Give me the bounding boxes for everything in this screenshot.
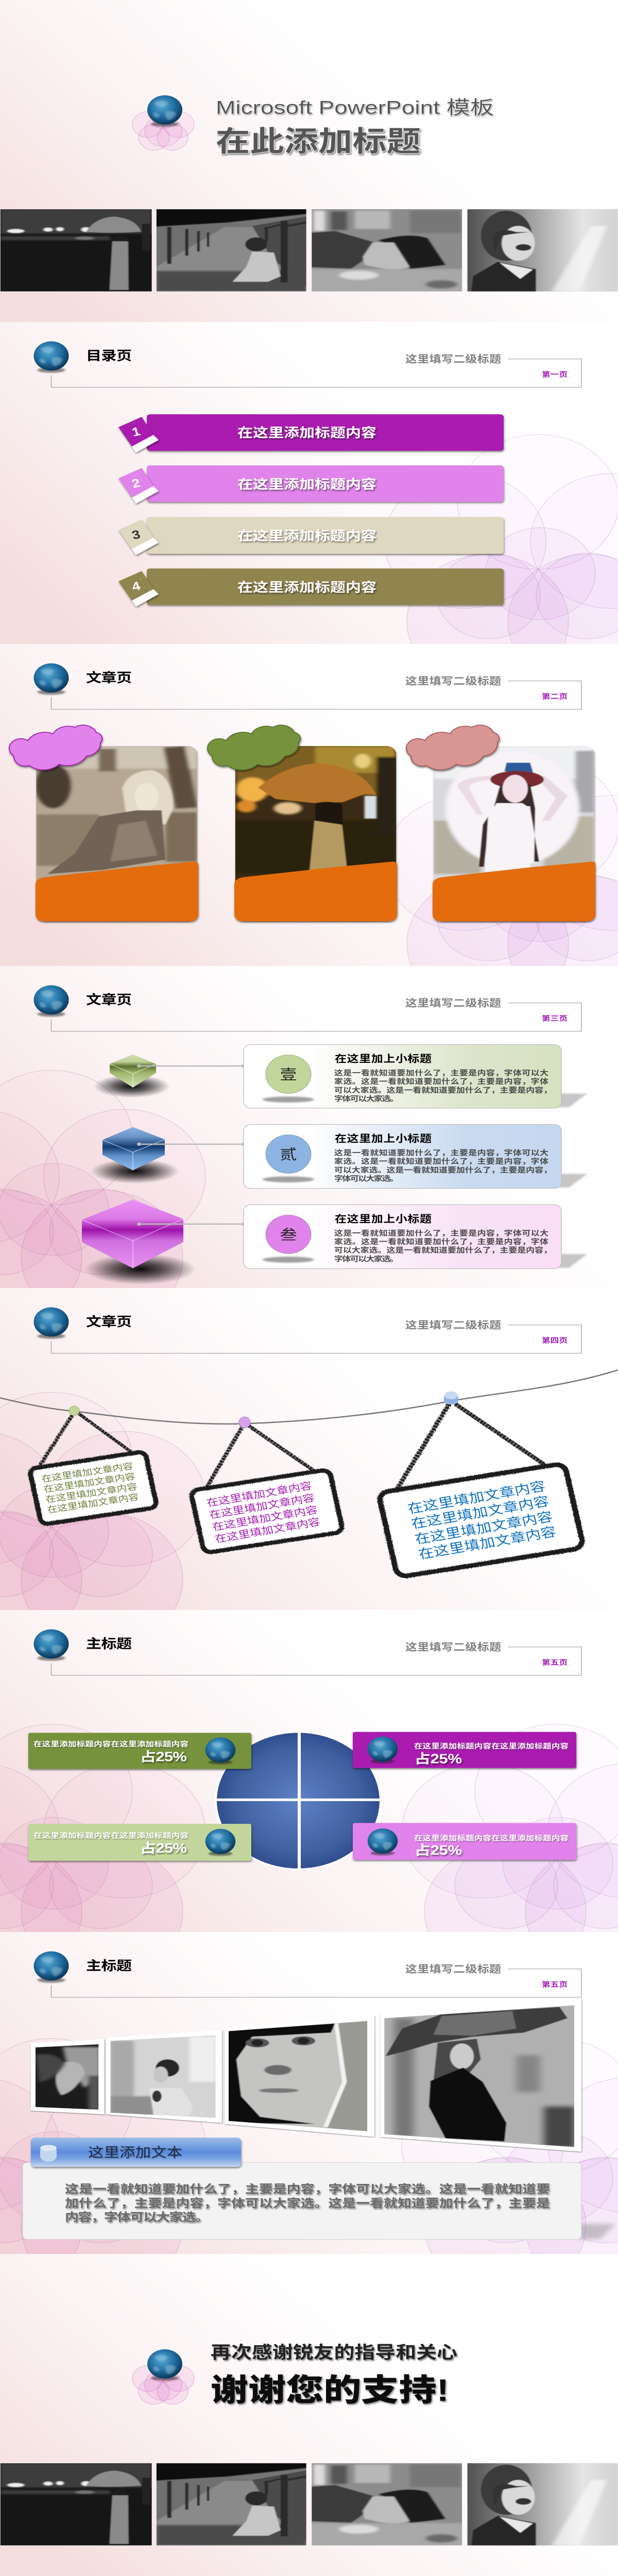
text card 1 — [244, 1045, 587, 1108]
bar — [147, 414, 504, 451]
decorative flower — [384, 756, 618, 1011]
panel body text: 加什么了，主要是内容，字体可以大家选。这是一看就知道要加什么了，主要是 — [65, 2196, 550, 2210]
decorative flower — [0, 1392, 205, 1647]
label: 在这里添加标题内容 — [237, 529, 376, 543]
sign text: 在这里填加文章内容 — [45, 1481, 138, 1504]
bar top right — [353, 1732, 576, 1768]
header frame — [52, 1003, 581, 1031]
icon: globe — [205, 1829, 235, 1856]
cube: green — [94, 1055, 170, 1098]
percentage: 占25% — [140, 1841, 187, 1856]
icon: globe — [34, 985, 69, 1016]
sign text: 在这里填加文章内容 — [410, 1494, 551, 1531]
header frame — [52, 1647, 581, 1675]
page title: 文章页 — [86, 1315, 132, 1329]
page title: 文章页 — [86, 993, 132, 1007]
badge numeral: 壹 — [280, 1067, 297, 1082]
background — [0, 1610, 618, 1932]
menu item 1 — [118, 414, 504, 452]
card body: 字体可以大家选。 — [334, 1255, 399, 1263]
quadrant disc — [215, 1731, 382, 1870]
sign text: 在这里填加文章内容 — [214, 1516, 321, 1545]
header — [34, 985, 581, 1031]
card body — [334, 1229, 552, 1263]
decorative flower right — [402, 2039, 618, 2293]
tag — [118, 571, 159, 607]
background — [0, 644, 618, 966]
panel body text: 这是一看就知道要加什么了，主要是内容，字体可以大家选。这是一看就知道要 — [65, 2182, 550, 2196]
badge numeral: 叁 — [280, 1227, 297, 1243]
sign text: 在这里填加文章内容 — [205, 1480, 313, 1509]
card body: 这是一看就知道要加什么了，主要是内容，字体可以大 — [334, 1148, 548, 1157]
menu item 3 — [118, 517, 504, 555]
icon: globe — [368, 1828, 398, 1855]
subtitle: 这里填写二级标题 — [405, 353, 501, 365]
background — [0, 0, 618, 322]
thanks line one: 再次感谢锐友的指导和关心 — [211, 2343, 457, 2362]
sign text: 在这里填加文章内容 — [43, 1471, 136, 1494]
page title: 文章页 — [86, 671, 132, 685]
photo: woman with umbrella at night — [231, 744, 400, 923]
bar text: 在这里添加标题内容在这里添加标题内容 — [33, 1740, 188, 1749]
cloud tag — [208, 725, 300, 770]
orange panel — [234, 861, 397, 921]
percentage: 占25% — [415, 1752, 462, 1767]
card body: 可以大家选。这是一看就知道要加什么了，主要是内容， — [334, 1086, 552, 1094]
panel body text: 内容，字体可以大家选。 — [65, 2210, 209, 2224]
card body: 可以大家选。这是一看就知道要加什么了，主要是内容， — [334, 1165, 552, 1174]
subtitle: 这里填写二级标题 — [405, 1319, 501, 1331]
photo 3 frame — [225, 2015, 374, 2137]
menu item 2 — [118, 465, 504, 504]
icon: globe — [34, 1952, 69, 1982]
bar text: 在这里添加标题内容在这里添加标题内容 — [414, 1834, 569, 1842]
sign text: 在这里填加文章内容 — [41, 1461, 134, 1484]
card body — [334, 1148, 552, 1183]
sign text — [205, 1480, 321, 1545]
slide 1: cover — [0, 0, 618, 322]
card body: 家选。这是一看就知道要加什么了，主要是内容，字体 — [334, 1077, 548, 1086]
sign 1 — [29, 1406, 157, 1524]
decorative flower left — [0, 2039, 205, 2293]
slide 3: three photo cards — [0, 644, 618, 966]
label: 在这里添加标题内容 — [237, 580, 376, 595]
pin — [239, 1417, 250, 1428]
board — [379, 1463, 583, 1577]
decorative flower under globe — [132, 2365, 194, 2404]
icon: globe — [147, 95, 182, 127]
badge — [266, 1215, 311, 1253]
slide 2: contents — [0, 322, 618, 644]
background — [0, 322, 618, 644]
card body: 可以大家选。这是一看就知道要加什么了，主要是内容， — [334, 1246, 552, 1255]
slide 5: hanging signs — [0, 1288, 618, 1610]
card body: 字体可以大家选。 — [334, 1174, 399, 1183]
card 3 — [406, 725, 598, 923]
header frame — [52, 1969, 581, 1997]
header — [34, 1629, 581, 1675]
photo 4 frame — [381, 1999, 581, 2151]
board — [191, 1469, 343, 1553]
bar — [147, 568, 504, 605]
percentage: 占25% — [140, 1750, 187, 1765]
photo 2 frame — [106, 2030, 222, 2123]
header frame — [52, 681, 581, 709]
hanging strings — [40, 1413, 132, 1466]
icon: globe — [205, 1737, 235, 1765]
sign text: 在这里填加文章内容 — [414, 1509, 554, 1547]
badge — [266, 1055, 311, 1093]
header — [34, 1952, 581, 1997]
icon: globe — [34, 341, 69, 372]
card heading: 在这里加上小标题 — [335, 1133, 432, 1144]
connector 1 — [137, 1064, 246, 1067]
card body: 家选。这是一看就知道要加什么了，主要是内容，字体 — [334, 1237, 548, 1246]
header frame — [52, 359, 581, 387]
text card 3 — [244, 1205, 587, 1268]
page label: 第三页 — [542, 1014, 568, 1023]
page label: 第五页 — [542, 1658, 568, 1667]
bar text: 在这里添加标题内容在这里添加标题内容 — [33, 1832, 188, 1840]
sign text — [406, 1479, 558, 1562]
page title: 主标题 — [86, 1959, 132, 1973]
photo strip — [0, 2461, 618, 2548]
thanks line two: 谢谢您的支持! — [211, 2374, 449, 2408]
number: 1 — [130, 425, 142, 439]
decorative flower — [0, 1071, 205, 1325]
photo: woman in hat — [430, 744, 598, 923]
cloud tag — [406, 725, 499, 770]
board — [29, 1451, 157, 1524]
photo: woman in sepia — [32, 744, 201, 923]
sign text — [41, 1461, 140, 1515]
bar text: 在这里添加标题内容在这里添加标题内容 — [414, 1742, 569, 1751]
bar — [147, 465, 504, 502]
decorative flower left — [0, 1724, 205, 1979]
tag — [118, 519, 159, 555]
panel body text — [65, 2182, 550, 2224]
number: 2 — [130, 477, 142, 490]
icon: globe — [34, 1629, 69, 1660]
sign text: 在这里填加文章内容 — [211, 1504, 319, 1533]
hanging strings — [207, 1426, 314, 1487]
label: 在这里添加标题内容 — [237, 477, 376, 492]
button text: 这里添加文本 — [88, 2145, 182, 2160]
connector 3 — [137, 1222, 246, 1226]
icon: cylinder — [40, 2145, 57, 2162]
card heading: 在这里加上小标题 — [335, 1213, 432, 1225]
slide 8: thank you — [0, 2254, 618, 2576]
cube: purple — [82, 1199, 196, 1284]
bar bottom right — [353, 1823, 576, 1860]
hanging strings — [397, 1404, 545, 1490]
subtitle: 这里填写二级标题 — [405, 1963, 501, 1975]
rope — [0, 1370, 618, 1424]
connector 2 — [137, 1143, 246, 1146]
card body: 家选。这是一看就知道要加什么了，主要是内容，字体 — [334, 1157, 548, 1166]
label: 在这里添加标题内容 — [237, 426, 376, 440]
page label: 第四页 — [542, 1336, 568, 1345]
orange panel — [433, 861, 595, 921]
sign 3 — [379, 1392, 583, 1577]
card body — [334, 1069, 552, 1103]
number: 3 — [130, 528, 142, 542]
photo 1 frame — [31, 2039, 105, 2114]
icon: globe — [147, 2349, 182, 2381]
title line one: Microsoft PowerPoint 模板 — [216, 97, 494, 118]
header frame — [52, 1325, 581, 1353]
title line two: 在此添加标题 — [216, 126, 421, 157]
header — [34, 1308, 581, 1353]
card 2 — [208, 725, 400, 923]
slide 7: photo wall with text — [0, 1932, 618, 2254]
cloud tag — [9, 725, 102, 770]
orange panel — [36, 861, 198, 921]
number: 4 — [130, 580, 142, 594]
page title: 主标题 — [86, 1637, 132, 1651]
sign text: 在这里填加文章内容 — [208, 1492, 316, 1521]
icon: globe — [34, 664, 69, 694]
decorative flower right — [402, 1724, 618, 1979]
cube: blue — [91, 1127, 179, 1184]
background — [0, 1288, 618, 1610]
slide 4: three cubes with text cards — [0, 966, 587, 1288]
photo strip — [0, 207, 618, 294]
decorative flower — [384, 434, 618, 689]
sign text: 在这里填加文章内容 — [417, 1524, 558, 1562]
card heading: 在这里加上小标题 — [335, 1053, 432, 1064]
header — [34, 341, 581, 387]
background — [0, 1932, 618, 2254]
percentage: 占25% — [415, 1843, 462, 1858]
text card 2 — [244, 1124, 587, 1189]
page label: 第二页 — [542, 692, 568, 701]
decorative flower under globe — [132, 111, 194, 150]
bar bottom left — [28, 1824, 251, 1861]
pin — [69, 1406, 79, 1416]
subtitle: 这里填写二级标题 — [405, 675, 501, 687]
tag — [118, 468, 159, 504]
page title: 目录页 — [86, 349, 132, 363]
page label: 第一页 — [542, 370, 568, 379]
sign text: 在这里填加文章内容 — [46, 1492, 140, 1515]
page label: 第五页 — [542, 1980, 568, 1989]
badge numeral: 贰 — [280, 1147, 297, 1162]
badge — [266, 1134, 311, 1174]
slide 6: four quadrant bars — [0, 1610, 618, 1979]
sign text: 在这里填加文章内容 — [406, 1479, 547, 1516]
pin — [444, 1392, 458, 1404]
icon: globe — [34, 1308, 69, 1338]
bar top left — [28, 1733, 251, 1769]
header — [34, 664, 581, 709]
bar — [147, 517, 504, 554]
card 1 — [9, 725, 201, 923]
background — [0, 966, 618, 1288]
content panel — [23, 2163, 615, 2240]
icon: globe — [368, 1737, 398, 1764]
card body: 字体可以大家选。 — [334, 1094, 399, 1103]
sign 2 — [191, 1417, 343, 1553]
subtitle: 这里填写二级标题 — [405, 1641, 501, 1653]
subtitle: 这里填写二级标题 — [405, 997, 501, 1009]
blue label button — [31, 2138, 241, 2167]
card body: 这是一看就知道要加什么了，主要是内容，字体可以大 — [334, 1229, 548, 1238]
background — [0, 2254, 618, 2576]
menu item 4 — [118, 568, 504, 607]
card body: 这是一看就知道要加什么了，主要是内容，字体可以大 — [334, 1069, 548, 1077]
tag — [118, 417, 159, 452]
